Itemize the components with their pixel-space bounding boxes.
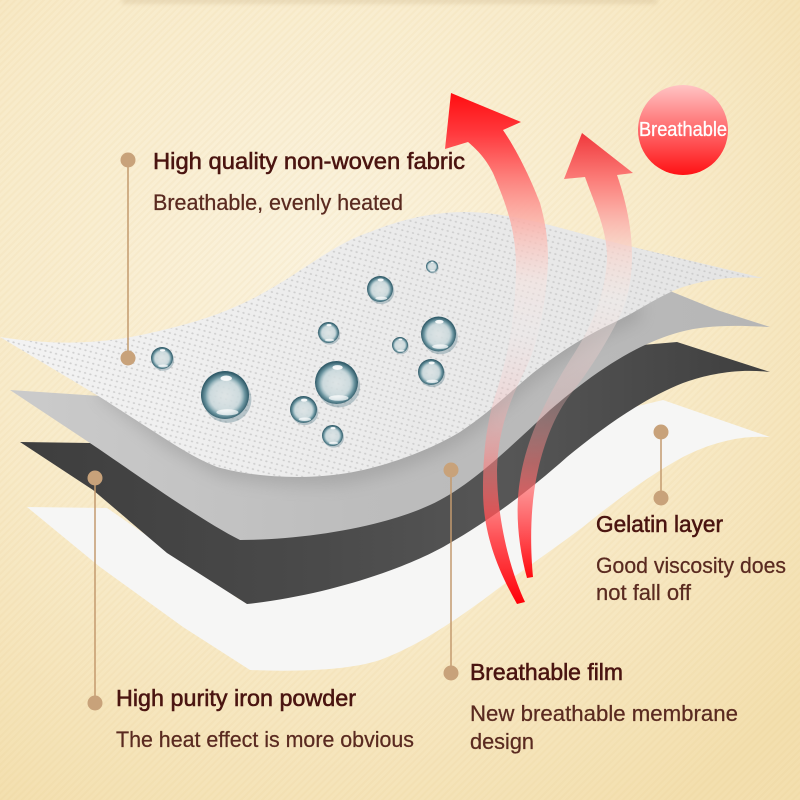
callout: gelatin layer: Gelatin layer [596, 511, 723, 537]
callout: non-woven fabric: Breathable, evenly heated [153, 190, 403, 215]
callout: non-woven fabric [120, 148, 465, 366]
callout: breathable film: design [470, 729, 534, 754]
layer: breathable film grey [10, 285, 770, 540]
callout: iron powder: The heat effect is more obvious [116, 727, 414, 752]
arrow: small heat arrow [518, 133, 633, 578]
badge: breathable [638, 85, 728, 175]
callout: breathable film: Breathable film [470, 659, 623, 685]
callout: breathable film: New breathable membrane [470, 701, 738, 726]
callout: gelatin layer: not fall off [596, 580, 692, 605]
arrow: large heat arrow [445, 93, 548, 604]
callout: iron powder: High purity iron powder [116, 685, 356, 711]
callout: breathable film [444, 462, 738, 754]
fabric shadow on film [100, 300, 640, 485]
callout: gelatin layer [596, 424, 786, 605]
callout: iron powder [88, 470, 414, 752]
badge: breathable: Breathable [639, 119, 727, 141]
layer: dark iron powder [20, 342, 770, 604]
callout: non-woven fabric: High quality non-woven fabric [153, 148, 465, 174]
callout: gelatin layer: Good viscosity does [596, 553, 786, 578]
layer: non-woven fabric [0, 212, 763, 477]
water droplets [151, 260, 458, 448]
layer: gelatin white [27, 400, 770, 671]
